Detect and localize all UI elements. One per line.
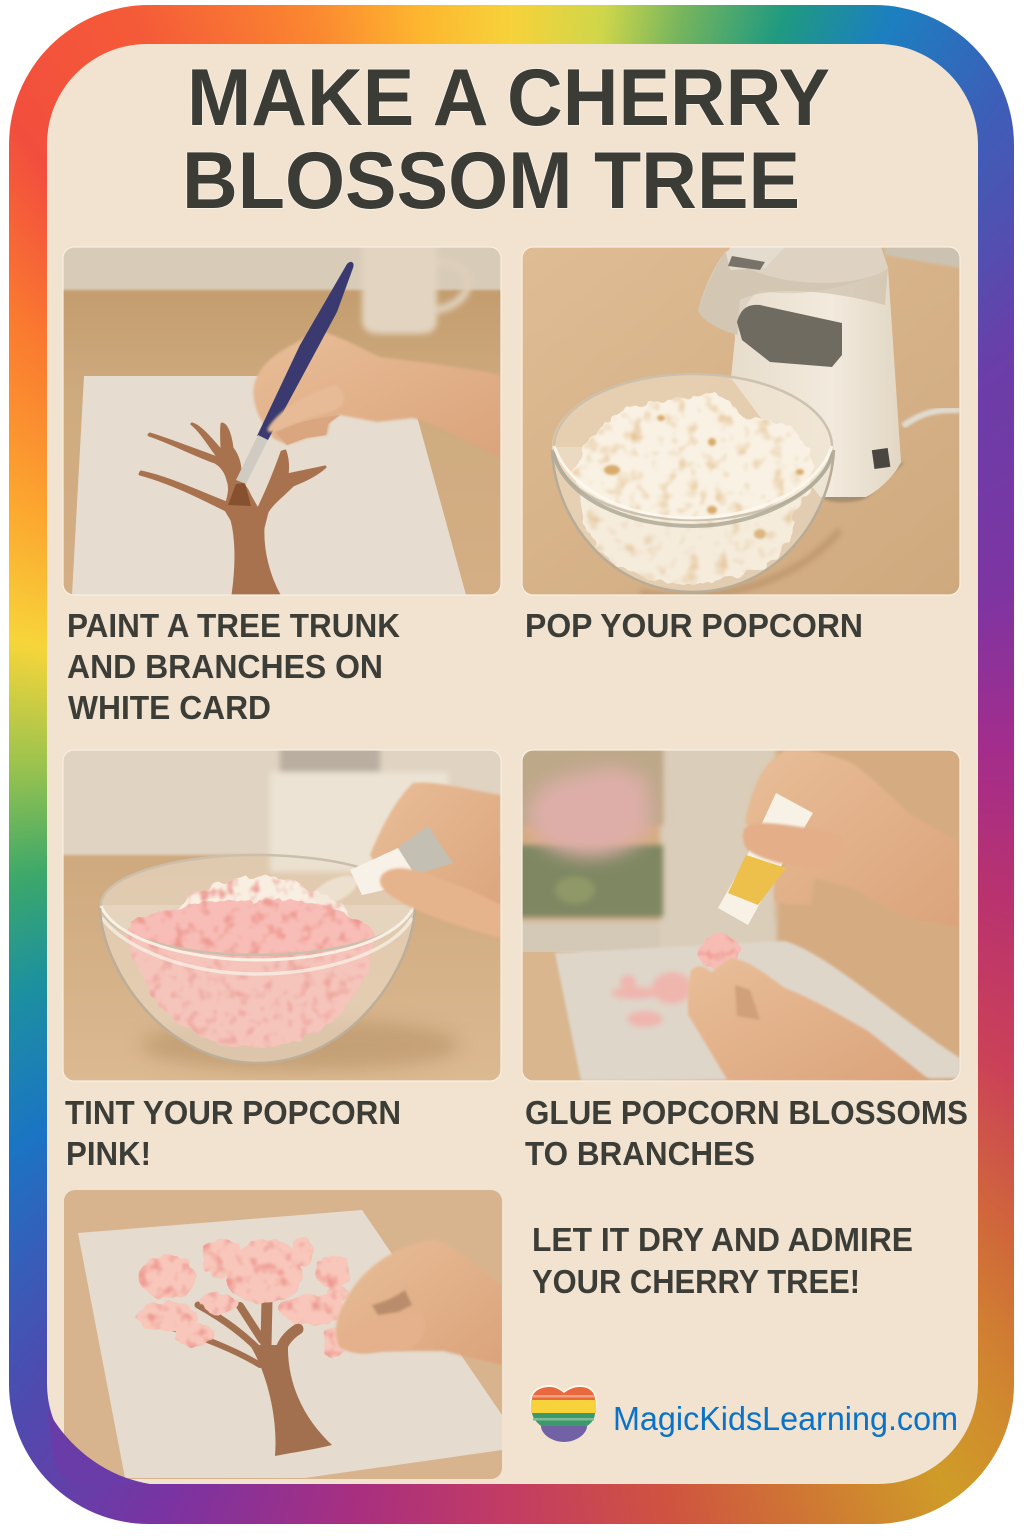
- cord: [903, 410, 960, 426]
- blurred window with blossoms: [522, 750, 779, 942]
- switch: [872, 448, 890, 469]
- upper hand: [745, 750, 958, 928]
- glass bowl: [552, 373, 840, 596]
- caption: step 4: GLUE POPCORN BLOSSOMS: [525, 1094, 968, 1131]
- title: BLOSSOM TREE: [182, 136, 800, 226]
- lower hand: [688, 958, 931, 1081]
- panel: step 1 painting the tree: [55, 240, 515, 595]
- paper sheet: [555, 941, 960, 1081]
- caption: step 5: [532, 1221, 913, 1300]
- held pink puff: [698, 934, 740, 970]
- caption: step 3: [65, 1094, 401, 1172]
- thumb: [742, 822, 805, 865]
- hand: [336, 1240, 502, 1365]
- caption: step 1: PAINT A TREE TRUNK: [67, 607, 400, 644]
- frame corner overlap: [47, 1408, 150, 1484]
- caption: step 1: WHITE CARD: [68, 689, 271, 726]
- caption: step 1: [67, 607, 400, 726]
- icon: rainbow heart: [530, 1385, 597, 1442]
- painted tree: [140, 424, 325, 595]
- spilled tint: [312, 875, 357, 905]
- hand: [253, 332, 501, 458]
- caption: step 3: TINT YOUR POPCORN: [65, 1094, 401, 1131]
- hand with tint bottle: [309, 782, 501, 938]
- icon: mug: [362, 240, 468, 334]
- caption: step 1: AND BRANCHES ON: [67, 648, 383, 685]
- glass bowl with pink popcorn: [100, 855, 415, 1063]
- title: MAKE A CHERRY: [187, 53, 830, 143]
- panel: step 2 popping popcorn: [522, 247, 960, 596]
- paper sheet: [78, 1210, 502, 1478]
- caption: step 2: POP YOUR POPCORN: [525, 607, 863, 644]
- panel: step 3 tinting popcorn: [55, 745, 510, 1090]
- panel outlines: [63, 247, 960, 1081]
- blurred appliance: [270, 745, 448, 872]
- panel: step 4 gluing blossoms: [515, 740, 960, 1087]
- caption: step 4: [525, 1094, 968, 1172]
- bowl shadow: [140, 1019, 460, 1071]
- blurred pink puffs on paper: [611, 972, 692, 1027]
- popcorn: [572, 392, 812, 584]
- panel: step 5 finished tree: [64, 1190, 502, 1479]
- popcorn popper: [698, 247, 905, 502]
- title: [182, 53, 830, 226]
- paper sheet: [72, 376, 466, 595]
- glue stick: [718, 793, 813, 925]
- website address: MagicKidsLearning.com: [613, 1400, 958, 1437]
- caption: step 3: PINK!: [66, 1135, 151, 1172]
- caption: step 5: LET IT DRY AND ADMIRE: [532, 1221, 913, 1258]
- paintbrush: [236, 262, 354, 484]
- caption: step 4: TO BRANCHES: [525, 1135, 755, 1172]
- window: [737, 305, 842, 367]
- pink popcorn blossoms: [137, 1238, 350, 1357]
- tree trunk and branches: [172, 1300, 332, 1456]
- caption: step 5: YOUR CHERRY TREE!: [532, 1263, 860, 1300]
